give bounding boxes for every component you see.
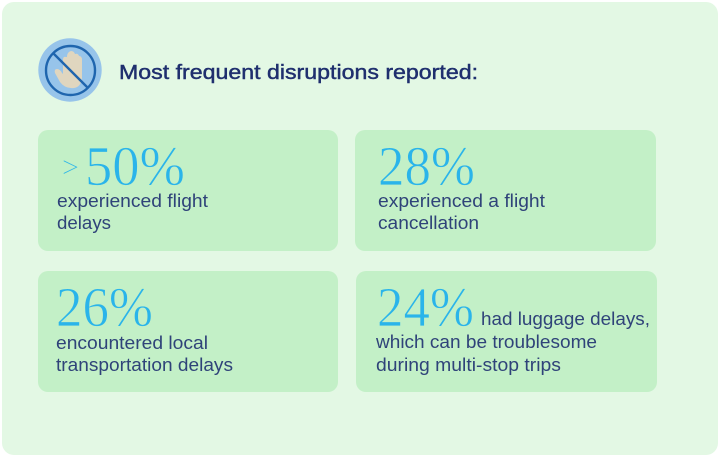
- card: luggage delays: had luggage delays,: [481, 309, 650, 329]
- card: flight delays: [38, 130, 338, 251]
- card: local transportation delays: encountered local: [56, 333, 208, 353]
- card: flight delays: >: [62, 151, 79, 184]
- card: luggage delays: during multi-stop trips: [376, 355, 561, 375]
- card: flight delays: experienced flight: [57, 191, 208, 211]
- card: local transportation delays: 26%: [56, 277, 153, 339]
- title: Most frequent disruptions reported:: [119, 61, 478, 84]
- icon: no hand: [38, 38, 102, 102]
- card: flight delays: 50%: [85, 136, 185, 198]
- card: flight cancellation: [355, 130, 656, 251]
- card: luggage delays: [356, 271, 657, 392]
- card: flight cancellation: cancellation: [378, 213, 479, 233]
- card: luggage delays: which can be troublesome: [375, 332, 597, 352]
- card: flight cancellation: experienced a flight: [378, 191, 545, 211]
- card: local transportation delays: [38, 271, 338, 392]
- card: flight cancellation: 28%: [378, 136, 475, 198]
- card: luggage delays: 24%: [377, 277, 474, 339]
- card: local transportation delays: transportation delays: [56, 355, 233, 375]
- card: flight delays: delays: [57, 213, 111, 233]
